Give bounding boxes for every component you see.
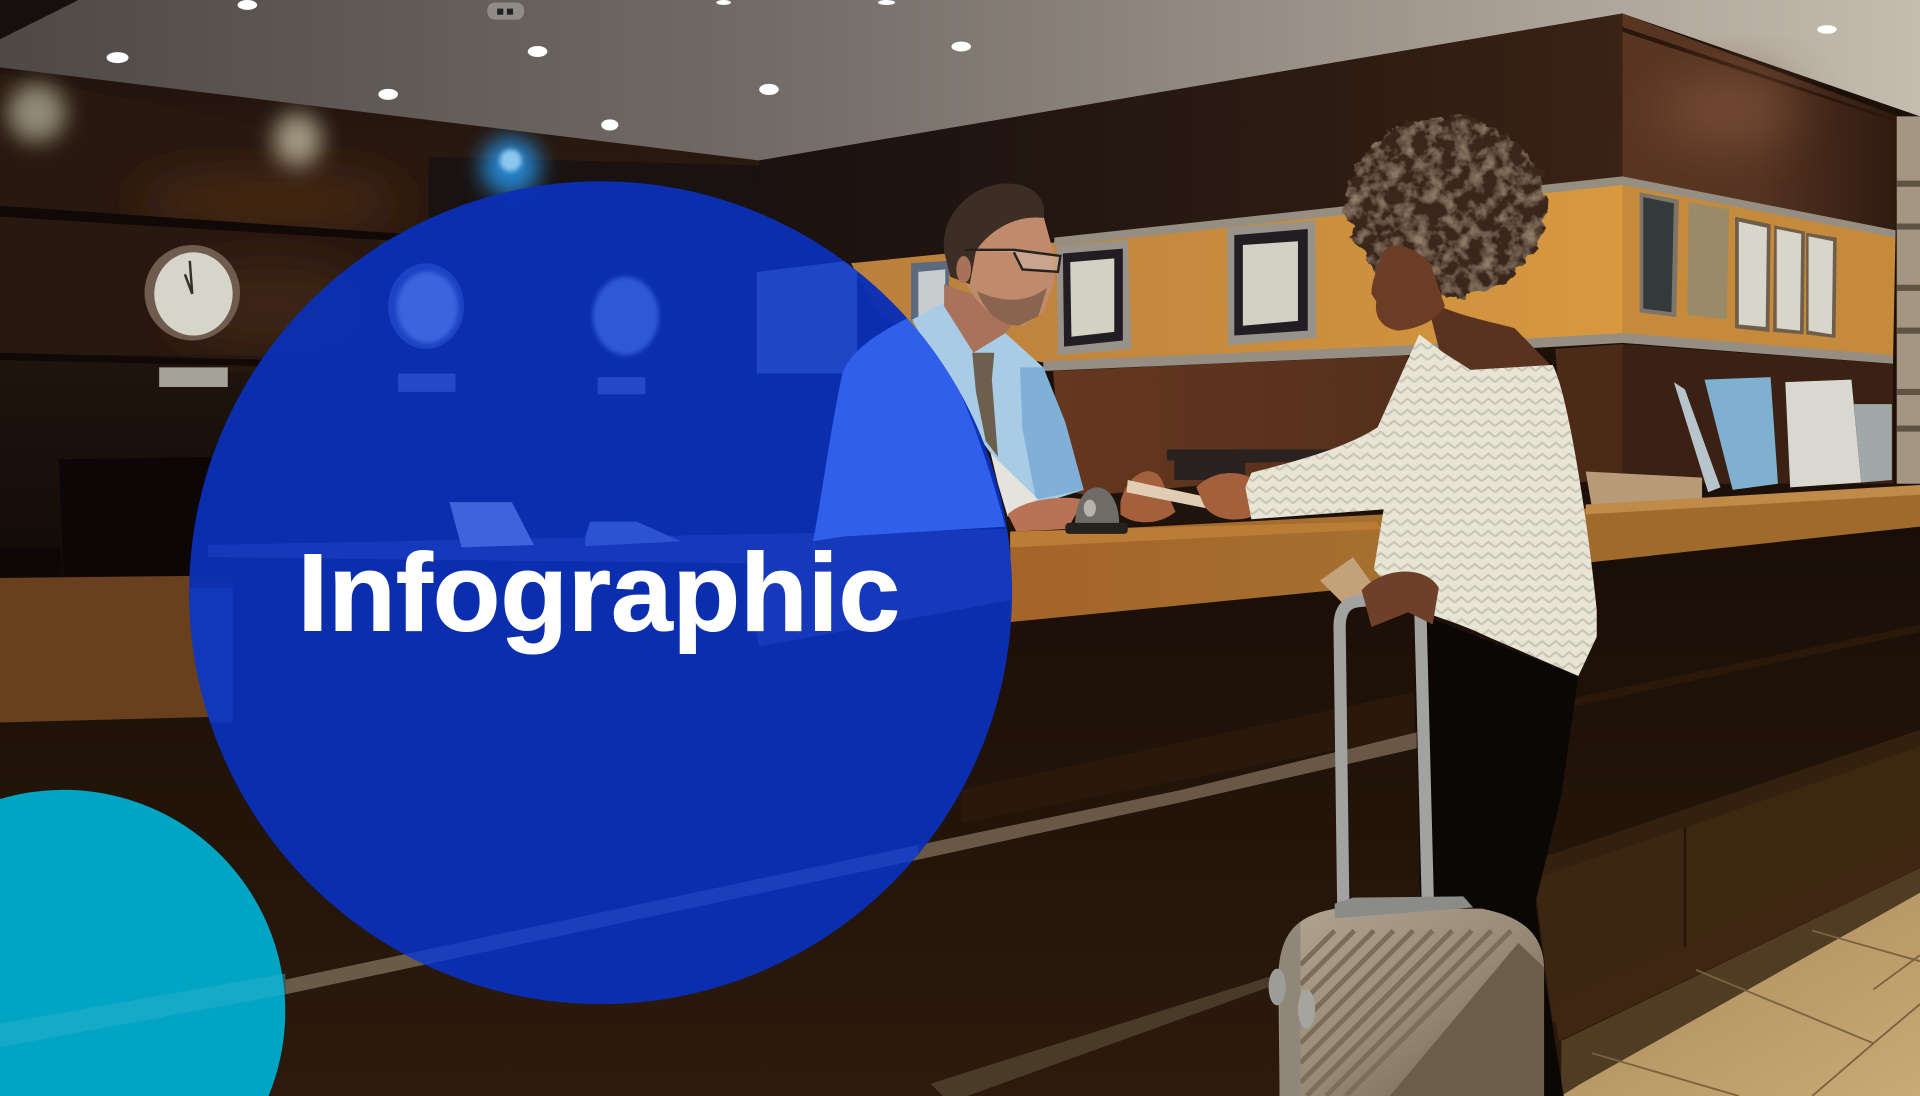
trousers	[1414, 612, 1578, 1096]
reflected strip	[404, 845, 918, 964]
counter top	[1010, 449, 1920, 622]
ear	[956, 256, 971, 283]
reflections inside the blue circle	[190, 260, 1011, 994]
certificate frames	[911, 192, 1837, 355]
face	[1371, 246, 1445, 331]
left wood wall	[0, 61, 759, 588]
ceiling lights	[107, 0, 1837, 130]
glasses	[965, 250, 1060, 272]
shirt	[912, 302, 1084, 502]
left counter	[0, 547, 233, 722]
neck	[944, 284, 1022, 353]
reflected objects on desk	[449, 502, 534, 547]
wall lights	[7, 83, 540, 196]
lower brown wall	[1053, 344, 1893, 496]
sweater knit texture	[1245, 334, 1597, 676]
floor	[1561, 868, 1920, 1096]
clock reflections	[388, 263, 659, 394]
phone	[1320, 557, 1378, 602]
shell	[1278, 909, 1544, 1096]
far right stone wall	[1897, 116, 1920, 484]
receptionist sleeve	[813, 316, 1005, 541]
ceiling	[0, 0, 1920, 160]
lower desk front	[0, 527, 1920, 1096]
tie	[972, 353, 998, 457]
title: Infographic	[298, 532, 900, 655]
reflected panels	[757, 260, 857, 374]
hair	[944, 184, 1044, 284]
brochures on the counter	[1586, 377, 1892, 507]
ribs	[1280, 918, 1544, 1096]
hands exchanging card	[1120, 471, 1262, 522]
guest	[1245, 116, 1597, 1096]
hair	[1346, 116, 1547, 298]
face	[959, 214, 1054, 326]
large blue circle	[189, 181, 1012, 1004]
neck and shoulders	[1427, 300, 1553, 370]
top handle plate	[1335, 896, 1473, 918]
hand on the counter	[1008, 498, 1084, 531]
handle	[1340, 599, 1428, 906]
suitcase	[1269, 599, 1544, 1096]
receptionist	[912, 184, 1084, 531]
wall clock	[144, 245, 240, 387]
guest's hand on the handle	[1362, 572, 1439, 627]
upper wood panels behind the desk	[759, 14, 1898, 263]
white cuff	[991, 453, 1038, 517]
orange wood band	[851, 176, 1896, 371]
teal circle	[0, 790, 285, 1096]
service bell	[1065, 487, 1128, 534]
sweater	[1245, 334, 1597, 676]
